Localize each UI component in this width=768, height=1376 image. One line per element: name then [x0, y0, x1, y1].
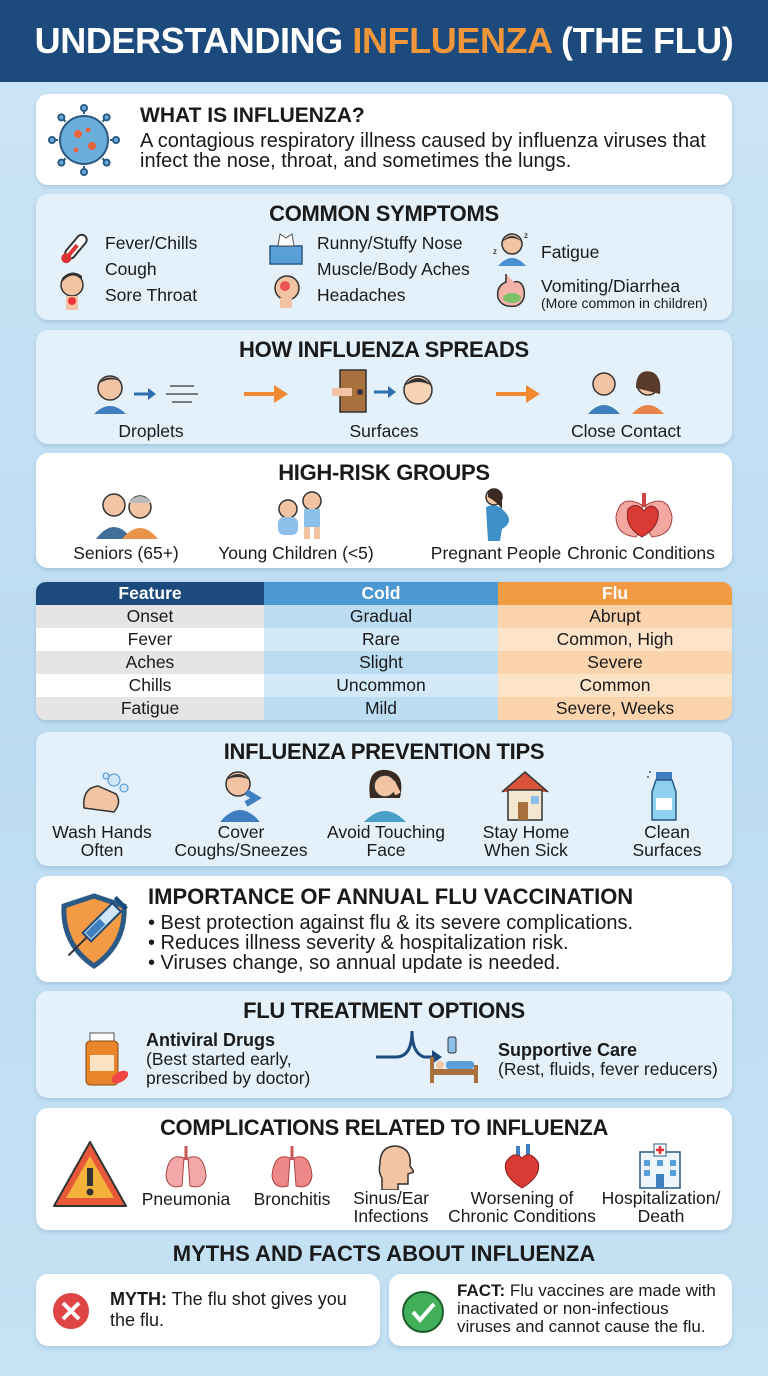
panel: common symptoms: Vomiting/Diarrhea	[541, 276, 680, 296]
panel: myth	[36, 1274, 380, 1346]
icon: pregnant person	[485, 488, 509, 541]
icon: spray bottle	[647, 771, 677, 821]
symptom texts col 3: Fatigue	[541, 242, 599, 262]
icon: pill bottle	[86, 1032, 128, 1086]
comparison table: cold vs flu: Chills	[129, 675, 171, 695]
text: antiviral drugs	[146, 1030, 310, 1088]
icon: house	[502, 771, 548, 821]
text: pneumonia: Pneumonia	[142, 1189, 230, 1209]
icon: shield with syringe	[61, 893, 128, 969]
comparison table: cold vs flu: Mild	[365, 698, 397, 718]
text: supportive care: (Rest, fluids, fever reducers)	[498, 1059, 718, 1079]
icon: fatigue	[493, 231, 528, 266]
text: surfaces: Surfaces	[349, 421, 419, 441]
text: myth: MYTH: The flu shot gives you	[110, 1289, 347, 1309]
comparison table: cold vs flu: Gradual	[350, 606, 412, 626]
panel: how influenza spreads	[36, 330, 732, 444]
panel: complications	[36, 1108, 732, 1230]
comparison table: cold vs flu: Fever	[128, 629, 172, 649]
text: bronchitis: Bronchitis	[254, 1189, 330, 1209]
title: UNDERSTANDING INFLUENZA (THE FLU)	[35, 20, 733, 61]
heading: vaccination: IMPORTANCE OF ANNUAL FLU VACCINATION	[148, 884, 633, 909]
panel: common symptoms: Sore Throat	[105, 285, 197, 305]
comparison table: cold vs flu: Onset	[127, 606, 173, 626]
text: hospitalization: Death	[638, 1206, 684, 1226]
panel: common symptoms: Cough	[105, 259, 157, 279]
panel: high-risk groups	[36, 453, 732, 568]
text: wash hands: Often	[81, 840, 123, 860]
comparison table: cold vs flu: Rare	[362, 629, 400, 649]
icon: green check	[401, 1290, 445, 1334]
panel: treatment options	[36, 991, 732, 1098]
text: avoid touching face: Avoid Touching	[327, 822, 445, 842]
text: antiviral drugs: prescribed by doctor)	[146, 1068, 310, 1088]
heading: myths and facts: MYTHS AND FACTS ABOUT INFLUENZA	[173, 1241, 595, 1266]
icon: lungs pneumonia	[166, 1146, 206, 1188]
text: supportive care	[498, 1040, 718, 1079]
header banner	[0, 0, 768, 82]
icon: wash hands	[83, 772, 128, 813]
bullet list: • Best protection against flu & its severe complications.	[148, 912, 633, 934]
panel: what is influenza	[36, 94, 732, 185]
text: cover coughs: Cover	[218, 822, 264, 842]
text: clean surfaces: Surfaces	[632, 840, 702, 860]
text: stay home	[483, 822, 569, 860]
comparison table: cold vs flu: Aches	[126, 652, 174, 672]
icon: fatigue: z	[524, 231, 528, 240]
comparison table: cold vs flu: Slight	[359, 652, 403, 672]
heading: prevention tips: INFLUENZA PREVENTION TIPS	[224, 739, 544, 764]
text: myth	[110, 1289, 347, 1331]
icon: sore throat	[60, 272, 84, 310]
comparison table: cold vs flu	[36, 582, 732, 720]
text: worsening chronic: Worsening of	[471, 1188, 573, 1208]
text: stay home: Stay Home	[483, 822, 569, 842]
icon: cover cough	[220, 771, 262, 822]
icon: head profile	[378, 1145, 414, 1190]
icon: avoid touching face	[364, 770, 406, 822]
comparison table: cold vs flu: Abrupt	[589, 606, 641, 626]
text: chronic conditions: Chronic Conditions	[567, 543, 715, 563]
icon: red x	[50, 1290, 92, 1332]
comparison table: cold vs flu: Fatigue	[121, 698, 179, 718]
text: cover coughs: Coughs/Sneezes	[174, 840, 308, 860]
text: wash hands	[52, 822, 152, 860]
text: sinus/ear infections	[353, 1188, 429, 1226]
icon: thermometer	[61, 234, 88, 264]
text: myth: the flu.	[110, 1310, 164, 1330]
icon: virus	[48, 104, 120, 176]
text: clean surfaces	[632, 822, 702, 860]
text: antiviral drugs: Antiviral Drugs	[146, 1030, 275, 1050]
text: fact	[457, 1282, 716, 1336]
bullet list: • Viruses change, so annual update is needed.	[148, 952, 560, 974]
comparison table: cold vs flu: Cold	[362, 583, 400, 603]
text: avoid touching face: Face	[367, 840, 405, 860]
panel: fact	[389, 1274, 732, 1346]
icon: surfaces	[332, 369, 433, 413]
text: fact: FACT: Flu vaccines are made with	[457, 1281, 716, 1300]
comparison table: cold vs flu: Common, High	[557, 629, 673, 649]
text: hospitalization: Hospitalization/	[602, 1188, 720, 1208]
symptom texts col 1: Fever/Chills	[105, 233, 197, 253]
text: sinus/ear infections: Sinus/Ear	[353, 1188, 429, 1208]
text: supportive care: Supportive Care	[498, 1040, 637, 1060]
icon: headache	[274, 275, 300, 308]
comparison table: cold vs flu: Severe, Weeks	[556, 698, 674, 718]
text: fact: inactivated or non-infectious	[457, 1299, 669, 1318]
heading: complications: COMPLICATIONS RELATED TO INFLUENZA	[160, 1115, 608, 1140]
text: pregnant people: Pregnant People	[431, 543, 561, 563]
comparison table: cold vs flu: Common	[580, 675, 650, 695]
text: worsening chronic	[437, 1189, 607, 1225]
comparison table: cold vs flu: Feature	[118, 583, 182, 603]
bullet list	[148, 912, 633, 974]
panel: common symptoms: Muscle/Body Aches	[317, 259, 470, 279]
comparison table: cold vs flu: Uncommon	[336, 675, 426, 695]
symptom texts col 2: Runny/Stuffy Nose	[317, 233, 463, 253]
icon: droplets	[94, 375, 198, 414]
text: close contact: Close Contact	[571, 421, 681, 441]
text: sinus/ear infections: Infections	[354, 1206, 428, 1226]
text: worsening chronic: Chronic Conditions	[448, 1206, 596, 1226]
icon: bed	[430, 1036, 478, 1083]
bullet list: • Reduces illness severity & hospitalization risk.	[148, 932, 569, 954]
icon: tissue box	[269, 233, 303, 265]
icon: fatigue: z	[493, 247, 497, 256]
text: cover coughs	[174, 822, 308, 860]
heading: high-risk groups: HIGH-RISK GROUPS	[278, 460, 490, 485]
text: definition: infect the nose, throat, and sometimes the lungs.	[140, 150, 571, 172]
text: clean surfaces: Clean	[644, 822, 690, 842]
comparison table: cold vs flu: Flu	[602, 583, 628, 603]
text: wash hands: Wash Hands	[52, 822, 152, 842]
text: fact: viruses and cannot cause the flu.	[457, 1317, 706, 1336]
icon: heart and lungs	[616, 493, 672, 538]
text: avoid touching face	[327, 822, 445, 860]
panel: common symptoms: Headaches	[317, 285, 406, 305]
text: definition	[140, 130, 706, 172]
icon: hospital	[636, 1142, 684, 1190]
comparison table: cold vs flu: Severe	[587, 652, 643, 672]
icon: stomach	[496, 274, 526, 308]
icon: seniors	[96, 493, 158, 539]
icon: heart	[500, 1142, 544, 1190]
icon: warning triangle	[53, 1141, 127, 1207]
heading: treatment: FLU TREATMENT OPTIONS	[243, 998, 525, 1023]
text: young children: Young Children (<5)	[218, 543, 374, 563]
heading: how influenza spreads: HOW INFLUENZA SPREADS	[239, 337, 529, 362]
text: stay home: When Sick	[484, 840, 568, 860]
arrow: treatment	[376, 1031, 442, 1062]
panel: common symptoms: (More common in children)	[541, 295, 708, 311]
icon: children	[278, 491, 322, 539]
arrow	[244, 385, 288, 403]
text: antiviral drugs: (Best started early,	[146, 1049, 292, 1069]
text: droplets: Droplets	[118, 421, 184, 441]
panel: prevention tips	[36, 732, 732, 866]
icon: close contact	[588, 371, 664, 414]
heading: what is influenza: WHAT IS INFLUENZA?	[140, 104, 365, 127]
arrow	[496, 385, 540, 403]
text: definition: A contagious respiratory illness caused by influenza viruses that	[140, 130, 706, 152]
text: hospitalization	[588, 1189, 734, 1225]
icon: lungs bronchitis	[272, 1146, 312, 1188]
heading: common symptoms: COMMON SYMPTOMS	[269, 201, 499, 226]
text: seniors: Seniors (65+)	[73, 543, 179, 563]
panel: annual flu vaccination	[36, 876, 732, 982]
panel: common symptoms	[36, 194, 732, 320]
